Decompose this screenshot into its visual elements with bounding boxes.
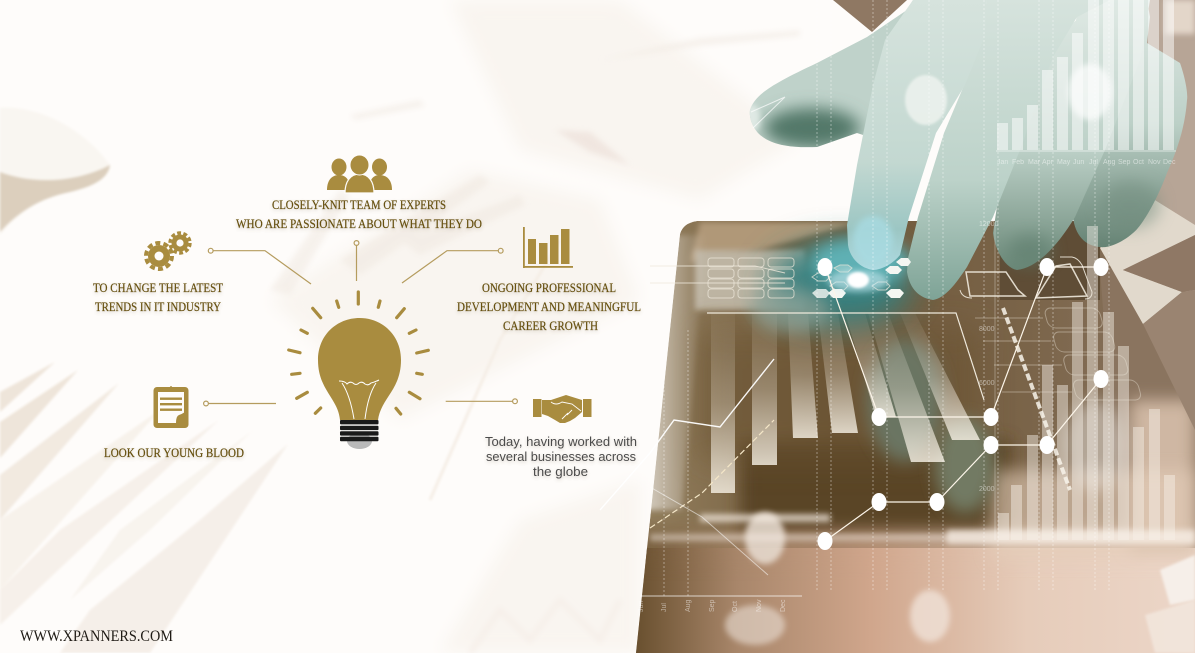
chart: top right monthly bars: Oct: [1133, 159, 1144, 166]
chart: lower right monthly bars: 12000: [979, 221, 999, 228]
chart: top right monthly bars: May: [1057, 159, 1071, 166]
heading: change the latest trends: [93, 280, 223, 314]
heading: professional development: DEVELOPMENT AND MEANINGFUL: [457, 299, 641, 314]
chart: lower right monthly bars: 2000: [979, 486, 995, 493]
finger reflections and teal glow on tablet: [750, 238, 995, 513]
heading: team of experts: WHO ARE PASSIONATE ABOUT WHAT THEY DO: [236, 216, 482, 231]
chart: lower right monthly bars: 6000: [979, 380, 995, 387]
bulb screw base: [340, 420, 378, 441]
bulb glass: [318, 318, 401, 420]
heading: professional development: ONGOING PROFESSIONAL: [482, 280, 616, 295]
month labels under left chart: Oct: [732, 601, 739, 612]
text block: worked with businesses: Today, having worked with: [485, 435, 637, 449]
heading: change the latest trends: TO CHANGE THE LATEST: [93, 280, 223, 295]
chart: top right monthly bars: Apr: [1042, 159, 1054, 166]
chart: top right monthly bars: Nov: [1148, 159, 1161, 166]
month labels under left chart: Jul: [661, 603, 668, 612]
left line chart on tablet: [600, 359, 802, 596]
month labels under left chart: Dec: [780, 599, 787, 612]
paper sheet at right of tablet: [1100, 197, 1195, 430]
background: pencil shadows bottom left: [0, 362, 288, 653]
heading: young blood: LOOK OUR YOUNG BLOOD: [104, 445, 244, 460]
node line chart with white markers: [818, 258, 1108, 550]
month labels under left chart: Jun: [638, 601, 645, 612]
bokeh highlights: [725, 64, 1195, 653]
heading: team of experts: [236, 197, 482, 231]
text block: worked with businesses: several businesses across: [486, 450, 636, 464]
chart: top right monthly bars: Jan: [997, 159, 1008, 166]
white horizontal light bands: [650, 514, 1195, 544]
text block: worked with businesses: the globe: [533, 465, 588, 479]
icon: clipboard: [154, 386, 188, 428]
heading: team of experts: CLOSELY-KNIT TEAM OF EXPERTS: [272, 197, 446, 212]
chart: top right monthly bars: Dec: [1163, 159, 1176, 166]
slanted translucent bars on tablet: [711, 313, 980, 493]
background: beige object top left: [0, 108, 110, 235]
bulb rays: [289, 292, 428, 414]
month labels under left chart: Aug: [685, 599, 692, 612]
heading: professional development: [457, 280, 641, 333]
tablet: [632, 221, 1195, 653]
bulb filament: [339, 380, 379, 419]
background: brown desk at top right: [833, 0, 1195, 300]
chart: top right monthly bars: Aug: [1103, 159, 1116, 166]
bulb cap: [347, 433, 372, 449]
thumb: [750, 0, 913, 148]
chart: top right monthly bars: Sep: [1118, 159, 1131, 166]
chart: top right monthly bars: Jul: [1089, 159, 1098, 166]
interface details on tablet: grid keys, hexagons, icons, pills: [650, 257, 1142, 490]
chart: lower right monthly bars: 8000: [979, 326, 995, 333]
heading: change the latest trends: TRENDS IN IT INDUSTRY: [95, 299, 222, 314]
connector lines: [204, 241, 517, 406]
glowing touch point: [828, 270, 888, 292]
text block: worked with businesses: [485, 435, 637, 479]
dashed vertical guide lines: [664, 0, 1109, 596]
chart: top right monthly bars: Mar: [1028, 159, 1041, 166]
icon: gears: [146, 233, 190, 269]
icon: bar chart: [523, 227, 573, 268]
chart: top right monthly bars: [996, 0, 1176, 166]
heading: professional development: CAREER GROWTH: [503, 318, 598, 333]
website url: WWW.XPANNERS.COM: [20, 628, 173, 645]
chart: lower right monthly bars: [979, 221, 1175, 540]
icon: team of people: [327, 155, 392, 193]
month labels under left chart: Nov: [756, 599, 763, 612]
light bulb: [289, 292, 428, 449]
chart: top right monthly bars: Jun: [1073, 159, 1084, 166]
icon: handshake: [533, 395, 592, 423]
chart: top right monthly bars: Feb: [1012, 159, 1024, 166]
month labels under left chart: Sep: [709, 599, 716, 612]
hand with fingers: [744, 0, 1187, 300]
month labels under left chart: [638, 599, 787, 612]
